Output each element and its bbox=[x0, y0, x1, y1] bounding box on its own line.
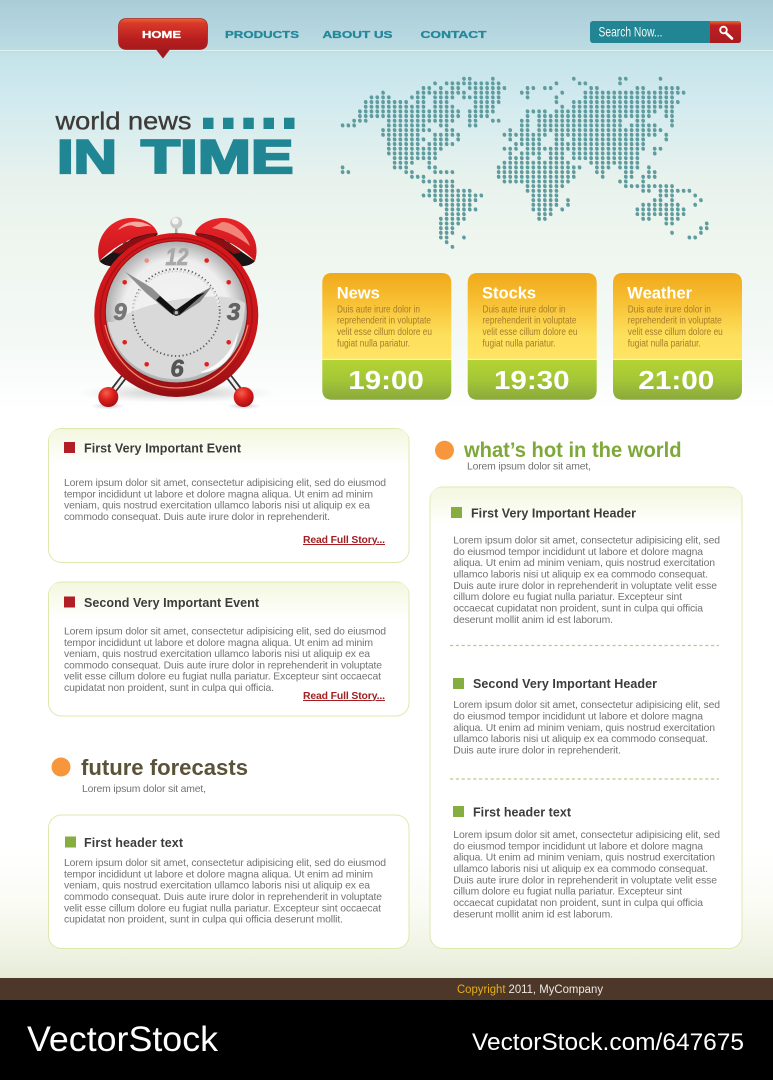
header body text: veniam, quis nostrud exercitation ullamco laboris nisi ut aliquip ex ea bbox=[64, 881, 370, 892]
card: news: velit esse cillum dolore eu bbox=[337, 327, 432, 338]
heading: what's hot in the world: what’s hot in the world bbox=[463, 439, 682, 462]
navigation bar bbox=[118, 18, 486, 58]
link: read full story: Read Full Story... bbox=[303, 691, 385, 702]
story: second very important header: Lorem ipsum dolor sit amet, consectetur adipisicing elit, sed bbox=[453, 700, 720, 711]
panel: second event bbox=[48, 582, 409, 716]
card: stocks: fugiat nulla pariatur. bbox=[482, 339, 556, 350]
story: first very important header bbox=[451, 506, 720, 626]
hour dots bbox=[122, 258, 231, 367]
story: first very important header: cillum dolore eu fugiat nulla pariatur. Excepteur sint bbox=[453, 592, 682, 603]
story: first header text bbox=[453, 805, 720, 920]
header body text: Lorem ipsum dolor sit amet, consectetur adipisicing elit, sed do eiusmod bbox=[64, 858, 386, 869]
card: stocks: reprehenderit in voluptate bbox=[482, 316, 577, 327]
card: stocks: Duis aute irure dolor in bbox=[482, 304, 566, 315]
five square markers bbox=[203, 118, 294, 129]
bullet: green square bbox=[451, 507, 462, 518]
heading: future forecasts: future forecasts bbox=[81, 755, 248, 780]
logo: world news in time: world news bbox=[54, 107, 192, 135]
event body text: commodo consequat. Duis aute irure dolor in reprehenderit. bbox=[64, 512, 330, 523]
card: weather: Weather bbox=[627, 284, 693, 302]
clock feet bbox=[98, 387, 118, 407]
bullet: red square bbox=[64, 442, 75, 453]
event body text bbox=[64, 626, 386, 694]
event body text bbox=[64, 478, 386, 523]
story: first header text: do eiusmod tempor incididunt ut labore et dolore magna bbox=[453, 841, 703, 852]
bullet: green square bbox=[453, 678, 464, 689]
heading: future forecasts bbox=[52, 755, 248, 795]
footer bar: 2011, MyCompany bbox=[508, 984, 603, 996]
story: second very important header: ullamco laboris nisi ut aliquip ex ea commodo consequat. bbox=[453, 734, 708, 745]
clock numerals: 3 bbox=[227, 299, 241, 326]
panel: first event bbox=[48, 428, 409, 562]
panel: first header text: First header text bbox=[84, 836, 184, 850]
card: stocks: Stocks bbox=[482, 284, 536, 302]
card: weather bbox=[613, 273, 742, 400]
clock body ring bbox=[94, 233, 258, 397]
search box bbox=[590, 21, 741, 43]
clock numerals: 9 bbox=[113, 299, 127, 326]
story: first header text: First header text bbox=[473, 805, 572, 819]
nav button: home bbox=[118, 18, 208, 58]
story: first very important header: ullamco laboris nisi ut aliquip ex ea commodo consequat. bbox=[453, 570, 708, 580]
event body text: tempor incididunt ut labore et dolore magna aliqua. Ut enim ad minim bbox=[64, 489, 373, 500]
event body text: veniam, quis nostrud exercitation ullamco laboris nisi ut aliquip ex ea bbox=[64, 501, 370, 512]
clock numerals: 6 bbox=[170, 356, 184, 382]
bullet: red square bbox=[64, 596, 75, 608]
story: first very important header: First Very Important Header bbox=[471, 506, 636, 520]
logo: world news in time: TIME bbox=[141, 130, 294, 183]
event body text: Lorem ipsum dolor sit amet, consectetur adipisicing elit, sed do eiusmod bbox=[64, 626, 386, 638]
left bell bbox=[98, 218, 158, 266]
event body text: cupidatat non proident, sunt in culpa qui officia. bbox=[64, 683, 274, 694]
card: weather: velit esse cillum dolore eu bbox=[628, 327, 723, 338]
story: second very important header: Duis aute irure dolor in reprehenderit. bbox=[453, 746, 621, 757]
header body text: commodo consequat. Duis aute irure dolor in reprehenderit in voluptate bbox=[64, 892, 382, 903]
story: first header text: deserunt mollit anim id est laborum. bbox=[453, 909, 613, 920]
logo: world news in time: IN bbox=[57, 130, 117, 183]
footer bar: Copyright bbox=[457, 984, 506, 996]
heading: what's hot in the world: Lorem ipsum dolor sit amet, bbox=[467, 462, 591, 472]
minute ticks bbox=[133, 269, 220, 356]
header body text bbox=[64, 858, 386, 926]
story: first very important header: aliqua. Ut enim ad minim veniam, quis nostrud exercitation bbox=[453, 558, 715, 569]
story: first very important header: Lorem ipsum dolor sit amet, consectetur adipisicing elit, sed bbox=[453, 536, 720, 546]
story: first header text: cillum dolore eu fugiat nulla pariatur. Excepteur sint bbox=[453, 887, 682, 898]
alarm clock illustration bbox=[77, 217, 277, 410]
bullet: green square bbox=[65, 836, 76, 848]
card: news bbox=[322, 273, 451, 400]
story: first header text: Duis aute irure dolor in reprehenderit in voluptate velit esse bbox=[453, 875, 717, 886]
event body text: tempor incididunt ut labore et dolore magna aliqua. Ut enim ad minim bbox=[64, 638, 373, 649]
clock numerals bbox=[113, 244, 241, 382]
link: read full story: Read Full Story... bbox=[303, 535, 385, 546]
watermark bar bbox=[0, 1000, 773, 1080]
right bell bbox=[195, 218, 257, 266]
header body text: velit esse cillum dolore eu fugiat nulla pariatur. Excepteur sint occaecat bbox=[64, 903, 381, 914]
panel: what's hot stories bbox=[430, 487, 742, 948]
story: first very important header: do eiusmod tempor incididunt ut labore et dolore magna bbox=[453, 547, 703, 558]
story: first header text: Lorem ipsum dolor sit amet, consectetur adipisicing elit, sed bbox=[453, 830, 720, 841]
face gloss bbox=[108, 296, 245, 379]
story: first very important header: deserunt mollit anim id est laborum. bbox=[453, 615, 613, 626]
search box: Search Now... bbox=[598, 24, 662, 40]
card: news: 19:00 bbox=[348, 367, 424, 395]
story: second very important header: aliqua. Ut enim ad minim veniam, quis nostrud exercitation bbox=[453, 723, 715, 734]
card: weather: fugiat nulla pariatur. bbox=[628, 339, 701, 350]
header body text: cupidatat non proident, sunt in culpa qui officia deserunt mollit. bbox=[64, 915, 343, 926]
story: first header text: aliqua. Ut enim ad minim veniam, quis nostrud exercitation bbox=[453, 853, 715, 864]
event body text: Lorem ipsum dolor sit amet, consectetur adipisicing elit, sed do eiusmod bbox=[64, 478, 386, 489]
card: weather: reprehenderit in voluptate bbox=[628, 316, 722, 327]
card: news: Duis aute irure dolor in bbox=[337, 304, 420, 315]
orange dot bbox=[52, 758, 70, 776]
heading: what's hot in the world bbox=[435, 439, 682, 472]
icon: magnifier bbox=[720, 27, 732, 38]
footer bar bbox=[0, 978, 773, 1000]
clock legs bbox=[113, 373, 240, 391]
nav link: products: PRODUCTS bbox=[225, 30, 299, 41]
clock top knob bbox=[175, 226, 178, 236]
story: second very important header bbox=[453, 677, 720, 757]
clock face bbox=[106, 242, 247, 382]
watermark bar: VectorStock.com/647675 bbox=[472, 1029, 744, 1056]
card: weather: 21:00 bbox=[638, 367, 714, 395]
clock numerals: 12 bbox=[166, 244, 189, 271]
event body text: velit esse cillum dolore eu fugiat nulla pariatur. Excepteur sint occaecat bbox=[64, 672, 381, 683]
card: news: fugiat nulla pariatur. bbox=[337, 339, 410, 350]
panel: second event: Second Very Important Event bbox=[84, 596, 260, 610]
panel: first event: First Very Important Event bbox=[84, 442, 242, 456]
bullet: green square bbox=[453, 806, 464, 817]
panel: first header text bbox=[48, 815, 409, 948]
card: news: reprehenderit in voluptate bbox=[337, 316, 431, 327]
story: second very important header: do eiusmod tempor incididunt ut labore et dolore magna bbox=[453, 711, 703, 722]
clock ground shadow bbox=[77, 383, 277, 403]
event body text: veniam, quis nostrud exercitation ullamco laboris nisi ut aliquip ex ea bbox=[64, 649, 370, 660]
story: first header text: ullamco laboris nisi ut aliquip ex ea commodo consequat. bbox=[453, 864, 708, 875]
nav button: home: HOME bbox=[142, 30, 181, 41]
header body text: tempor incididunt ut labore et dolore magna aliqua. Ut enim ad minim bbox=[64, 869, 373, 880]
story: first very important header: Duis aute irure dolor in reprehenderit in voluptate velit esse bbox=[453, 581, 717, 592]
heading: future forecasts: Lorem ipsum dolor sit amet, bbox=[82, 784, 206, 795]
story: first header text: occaecat cupidatat non proident, sunt in culpa qui officia bbox=[453, 898, 703, 909]
card: news: News bbox=[337, 284, 380, 302]
dotted world map bbox=[342, 78, 707, 247]
orange dot bbox=[435, 441, 454, 460]
clock bell rods bbox=[122, 240, 231, 252]
event body text: commodo consequat. Duis aute irure dolor in reprehenderit in voluptate bbox=[64, 660, 382, 671]
card: stocks: velit esse cillum dolore eu bbox=[482, 327, 578, 338]
story: first very important header: occaecat cupidatat non proident, sunt in culpa qui officia bbox=[453, 604, 703, 614]
watermark bar: VectorStock bbox=[27, 1020, 219, 1059]
logo: world news in time bbox=[54, 107, 295, 183]
clock hands bbox=[125, 272, 212, 316]
card: stocks: 19:30 bbox=[494, 367, 570, 395]
card: stocks bbox=[468, 273, 597, 400]
story: second very important header: Second Very Important Header bbox=[473, 677, 657, 691]
card: weather: Duis aute irure dolor in bbox=[628, 304, 711, 315]
nav link: about us: ABOUT US bbox=[322, 30, 393, 41]
nav link: contact: CONTACT bbox=[420, 30, 486, 41]
